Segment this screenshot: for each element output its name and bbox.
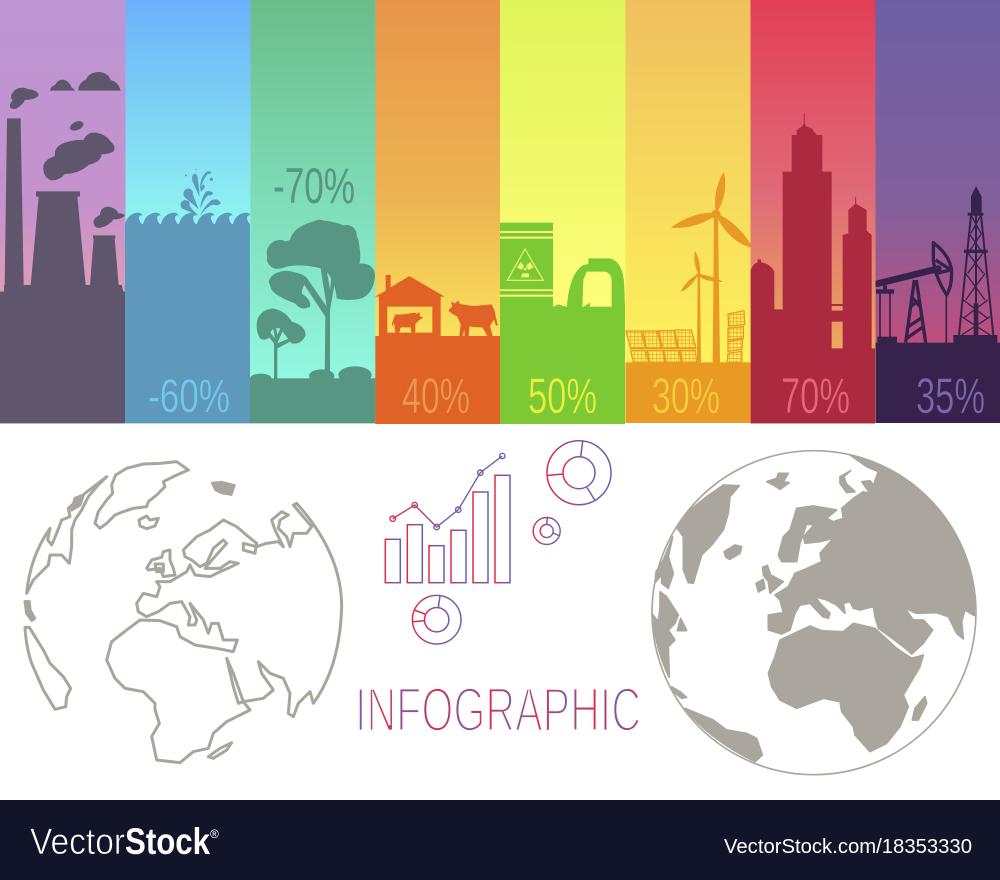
donut chart: small	[533, 518, 560, 544]
South America	[685, 708, 762, 762]
Madagascar	[912, 697, 927, 720]
icon: radioactive barrel and bag	[500, 223, 625, 424]
bars	[385, 475, 510, 583]
icon: radiation sign	[507, 249, 543, 280]
icon: oil pump and derrick	[875, 186, 1000, 424]
logo wordmark	[30, 821, 219, 862]
Iceland	[724, 545, 742, 559]
percent label: 40%: 40%	[402, 368, 470, 424]
logo wordmark: Stock	[125, 821, 210, 862]
panel: radiation waste column	[500, 0, 626, 424]
panel: oil column	[875, 0, 1000, 424]
Iceland outline	[139, 516, 158, 529]
North America pieces	[655, 537, 673, 588]
Greenland	[677, 485, 739, 583]
panel: forest column	[250, 0, 376, 424]
icon: wind turbines and solar panels	[625, 172, 753, 426]
Red Sea outline	[227, 658, 243, 703]
Britain	[763, 565, 783, 593]
Ireland	[756, 579, 765, 592]
Eurasia	[768, 455, 974, 654]
trend line	[390, 453, 505, 530]
icon: trees silhouette	[250, 220, 375, 423]
icon: factory silhouette	[0, 72, 125, 423]
Greenland outline	[95, 462, 188, 528]
Africa	[768, 623, 923, 752]
filled globe	[652, 451, 976, 775]
panel: city column	[750, 0, 876, 424]
South America outline	[25, 627, 71, 709]
watermark footer	[0, 800, 1000, 880]
panel: renewable energy column	[625, 0, 753, 426]
donut chart: lower	[412, 595, 461, 644]
panel: pollution factory column	[0, 0, 126, 424]
percent label: 30%: 30%	[652, 368, 720, 424]
logo wordmark: Vector	[30, 821, 125, 862]
globe ring	[652, 451, 976, 775]
Caribbean island	[25, 602, 35, 620]
Svalbard	[212, 482, 235, 495]
percent label: 70%: 70%	[781, 368, 850, 424]
percent label: 50%: 50%	[528, 368, 597, 424]
Britain outline	[147, 550, 175, 577]
percent label: -60%: -60%	[148, 369, 230, 422]
percent label: -70%: -70%	[273, 158, 355, 214]
title: INFOGRAPHIC: INFOGRAPHIC	[355, 676, 641, 745]
Madagascar outline	[208, 743, 232, 758]
bar and line chart	[385, 453, 510, 583]
panel: ocean column	[125, 0, 250, 424]
icon: barn and cows	[375, 275, 500, 424]
image id: VectorStock.com/18353330	[724, 836, 972, 858]
icon: water splash	[181, 169, 221, 216]
donut chart: large	[547, 441, 611, 505]
outline globe	[25, 462, 342, 763]
Novaya Zemlya	[840, 471, 855, 493]
Eurasia and Africa outline	[107, 503, 342, 763]
icon: waves and water body	[125, 210, 250, 423]
icon: skyscrapers silhouette	[751, 113, 875, 423]
panel: farming column	[375, 0, 500, 424]
logo wordmark: ®	[210, 827, 219, 841]
Svalbard	[767, 473, 789, 489]
North America outline	[27, 477, 107, 593]
